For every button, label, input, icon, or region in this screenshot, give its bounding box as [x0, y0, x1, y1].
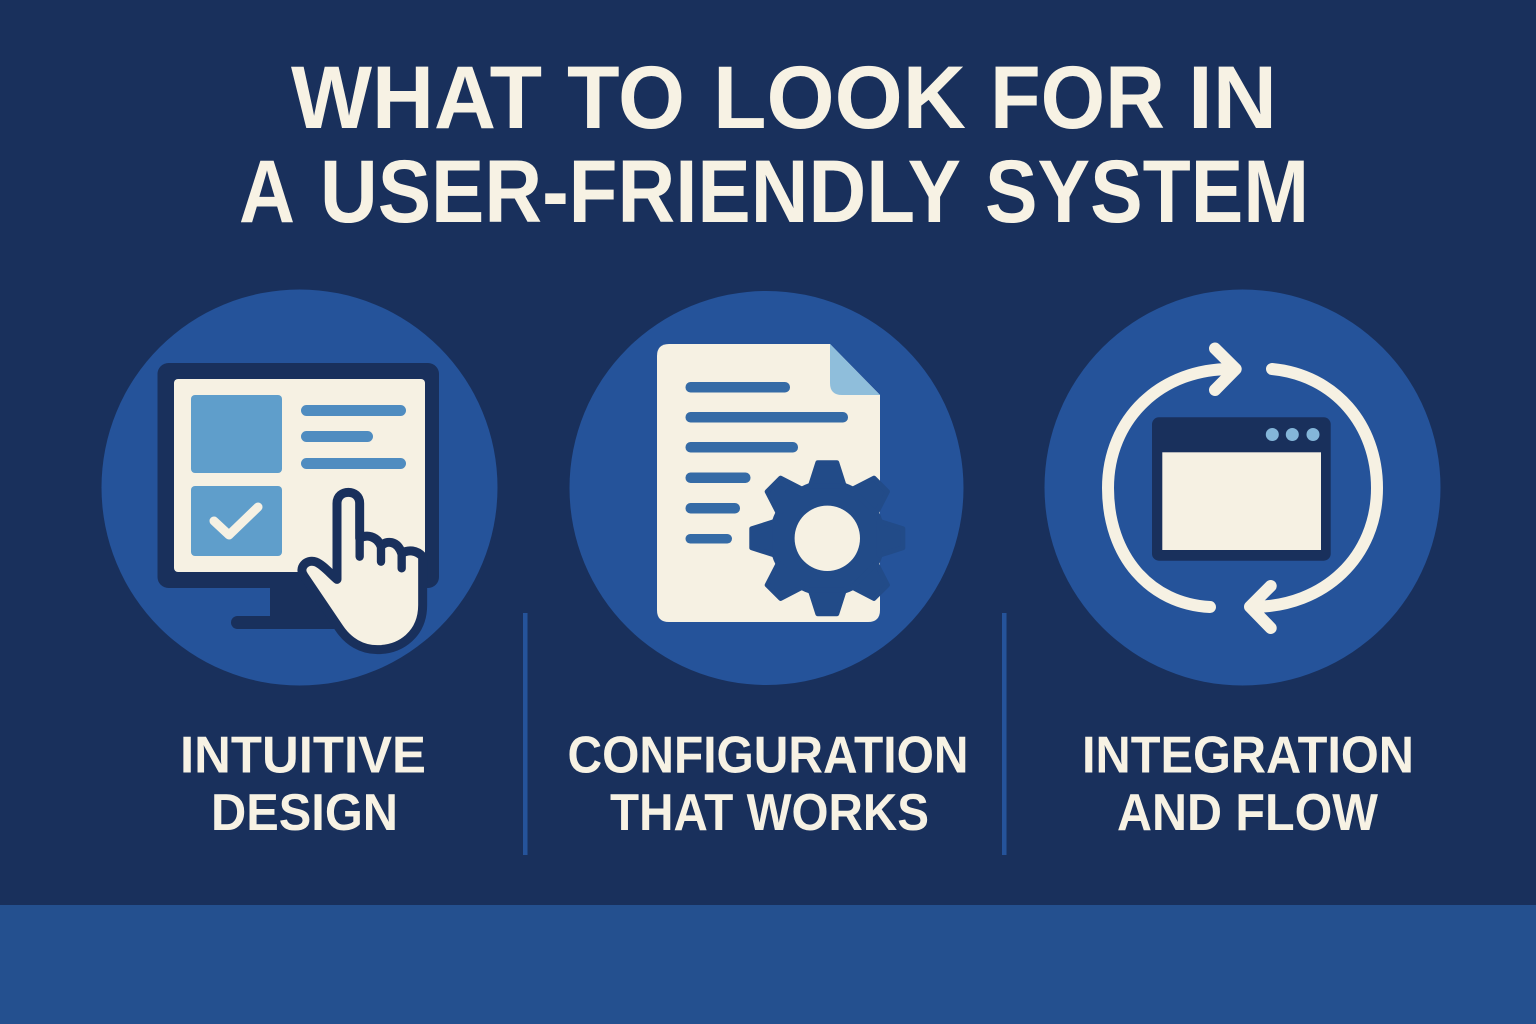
label: integration and flow	[1082, 726, 1414, 842]
label: intuitive design: DESIGN	[211, 784, 398, 842]
title: LOOK	[713, 47, 966, 147]
title: SYSTEM	[985, 141, 1309, 241]
label: intuitive design	[180, 726, 426, 842]
title: WHAT	[291, 47, 542, 147]
icon circle: configuration	[570, 291, 964, 685]
label: integration and flow: INTEGRATION	[1082, 726, 1414, 784]
title	[239, 47, 1309, 241]
title: TO	[567, 47, 685, 147]
title: FOR	[990, 47, 1165, 147]
icon circle: intuitive design	[102, 290, 498, 686]
label: configuration that works: CONFIGURATION	[568, 726, 968, 784]
title: A	[239, 141, 295, 241]
label: configuration that works: THAT WORKS	[610, 784, 929, 842]
footer band	[0, 905, 1536, 1024]
icon: document	[657, 344, 880, 622]
icon: gear	[752, 463, 903, 614]
label: intuitive design: INTUITIVE	[180, 726, 426, 784]
icon: computer monitor	[158, 363, 439, 629]
icon: application window	[1152, 417, 1331, 561]
title: IN	[1188, 47, 1277, 147]
icon circle: integration	[1044, 290, 1440, 686]
label: configuration that works	[568, 726, 968, 842]
panel: integration and flow	[1044, 290, 1440, 842]
label: integration and flow: AND FLOW	[1117, 784, 1379, 842]
panel: configuration that works	[568, 291, 968, 842]
panel: intuitive design	[102, 290, 498, 842]
icon: circular arrows	[1108, 348, 1377, 628]
title: USER-FRIENDLY	[320, 141, 961, 241]
icon: pointing hand	[302, 492, 423, 650]
